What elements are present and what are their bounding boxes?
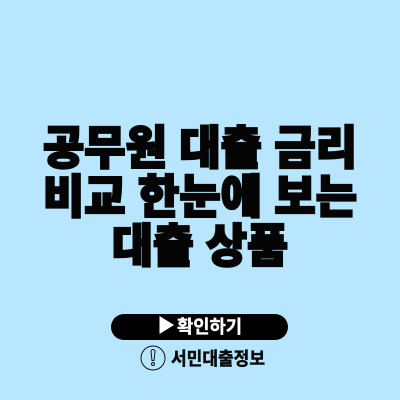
brand logo	[141, 346, 265, 370]
title	[43, 122, 357, 272]
button: confirm: 확인하기	[177, 317, 242, 337]
title: 공무원 대출 금리	[43, 122, 357, 174]
brand name: 서민대출정보	[171, 349, 265, 369]
title: 대출 상품	[112, 220, 288, 272]
icon: exclamation circle	[141, 346, 165, 370]
title: 비교 한눈에 보는	[43, 171, 357, 223]
button: confirm	[111, 314, 288, 340]
